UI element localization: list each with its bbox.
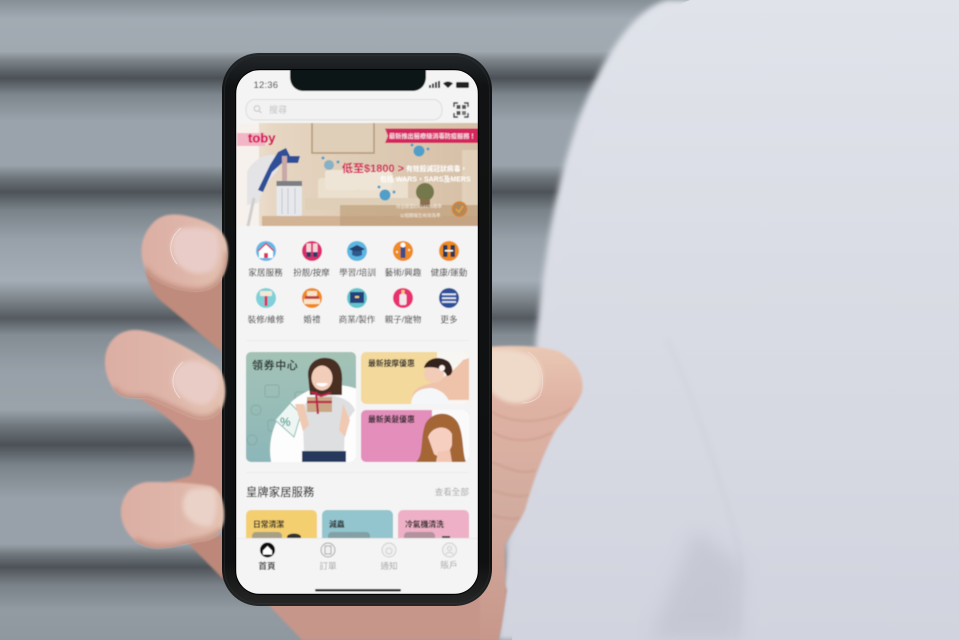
coupon centre title: 領券中心	[252, 358, 298, 372]
category labels: 婚禮	[303, 314, 321, 324]
category labels	[248, 266, 468, 324]
icon: QR code scanner	[454, 103, 468, 117]
icon: renovation	[256, 288, 276, 308]
bottom finger with nail	[121, 482, 224, 548]
banner viruses	[322, 144, 430, 200]
category labels: 家居服務	[248, 266, 283, 278]
phone body	[222, 53, 492, 606]
phone screen	[236, 68, 478, 594]
banner pink stripe and logo	[237, 130, 276, 146]
icon: kids and pets	[393, 288, 413, 308]
banner price text: 有效殺滅冠狀病毒，	[406, 164, 467, 173]
banner picture frame	[312, 121, 374, 153]
home indicator	[315, 589, 401, 592]
service card: daily cleaning: 日常清潔	[253, 519, 284, 529]
coupon tag: %	[280, 415, 291, 429]
status bar: 12:36	[254, 80, 278, 91]
category labels: 藝術/興趣	[385, 266, 422, 278]
banner pink headline ribbon	[385, 128, 478, 143]
service card: pest control	[322, 510, 393, 550]
woman holding gift	[295, 358, 355, 463]
finger webbing behind phone	[135, 270, 228, 578]
tab: account	[440, 543, 458, 570]
coupon centre card	[246, 352, 356, 463]
tab: notifications	[380, 543, 398, 571]
white shirt of the person	[498, 0, 959, 640]
promo banner	[237, 121, 478, 226]
banner small print: 以相關報告有效為準	[400, 212, 441, 219]
coupon tag	[275, 403, 301, 437]
icon: business	[347, 288, 367, 308]
massage woman	[411, 358, 469, 404]
service card: air conditioner cleaning: 冷氣機清洗	[405, 519, 444, 529]
banner plant	[416, 183, 434, 207]
banner spray gun	[247, 148, 302, 226]
hair offer card	[361, 410, 469, 462]
icon: home services	[256, 241, 276, 261]
middle finger with nail	[105, 330, 225, 419]
tab: notifications: 通知	[380, 560, 398, 571]
massage offer card	[361, 352, 469, 404]
icon: more	[439, 288, 459, 308]
banner price text	[342, 161, 471, 184]
service card: pest control: 減蟲	[329, 519, 345, 529]
banner price text: 低至$1800 >	[342, 161, 404, 175]
hair offer title: 最新美髮優惠	[368, 414, 415, 424]
service card: daily cleaning	[246, 510, 317, 550]
icon: fitness	[439, 241, 459, 261]
banner pink stripe and logo: toby	[248, 130, 276, 146]
hair woman	[416, 414, 466, 462]
notch	[290, 68, 426, 91]
massage offer title: 最新按摩優惠	[368, 358, 415, 368]
banner small print: 符合歐盟EN14476標準	[396, 203, 442, 210]
search bar	[246, 100, 442, 120]
category labels: 親子/寵物	[385, 314, 422, 324]
search bar: 搜尋	[269, 104, 287, 115]
thumb with nail	[480, 346, 583, 640]
hand palm below phone	[262, 560, 507, 640]
tab: orders	[319, 543, 337, 571]
banner orange badge	[452, 202, 466, 216]
top finger with nail	[141, 214, 228, 291]
icon: learning	[347, 241, 367, 261]
banner price text: 包括 WARS，SARS及MERS	[380, 174, 471, 184]
service card: air conditioner cleaning	[398, 510, 469, 550]
tab: orders: 訂單	[319, 560, 337, 571]
status bar	[254, 80, 470, 89]
bottom tab bar	[236, 538, 478, 594]
icon: beauty	[302, 241, 322, 261]
category labels: 更多	[440, 314, 458, 324]
section heading: 皇牌家居服務	[246, 485, 314, 499]
banner pink headline ribbon: 最新推出醫療級消毒防疫服務！	[389, 132, 476, 140]
icon: wedding	[302, 288, 322, 308]
category labels: 扮靚/按摩	[293, 266, 330, 278]
view all link: 查看全部	[435, 486, 469, 497]
category labels: 商業/製作	[339, 314, 376, 324]
category grid	[248, 241, 468, 324]
banner sofa	[262, 170, 478, 226]
icon: arts	[393, 241, 413, 261]
tab: home	[258, 542, 276, 571]
category labels: 健康/運動	[431, 266, 468, 278]
category labels: 學習/培訓	[339, 266, 376, 278]
tab: home: 首頁	[258, 560, 276, 571]
category labels: 裝修/維修	[248, 314, 285, 324]
tab: account: 賬戶	[440, 559, 458, 570]
banner small print	[396, 203, 442, 219]
